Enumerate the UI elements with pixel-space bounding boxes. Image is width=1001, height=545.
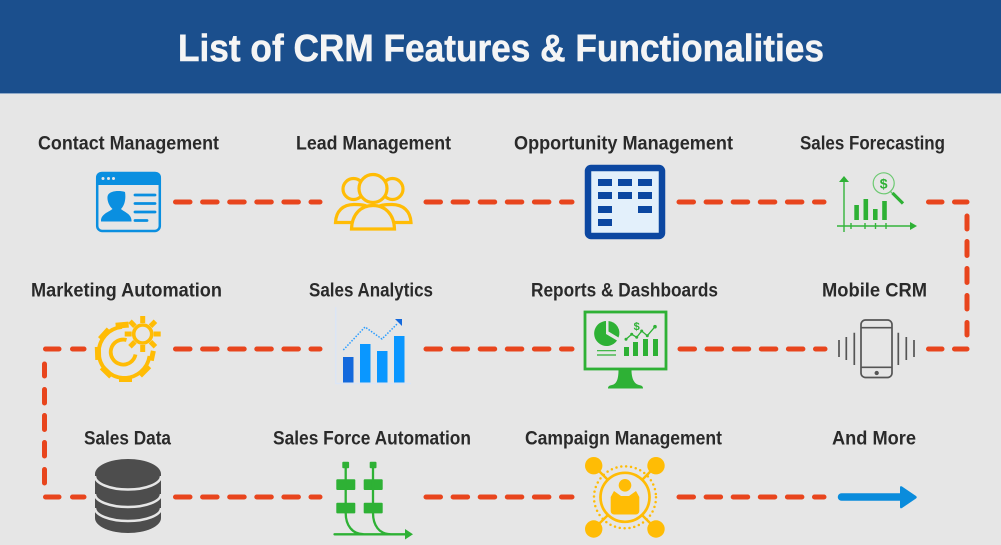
icon: analytics bars xyxy=(336,307,411,384)
label: Contact Management: Contact Management xyxy=(38,134,220,154)
label: Sales Data: Sales Data xyxy=(84,428,171,450)
icon: forecast chart with magnifier xyxy=(837,173,917,232)
label: Opportunity Management: Opportunity Management xyxy=(514,134,734,154)
icon: group of people xyxy=(336,174,411,229)
icon: forecast chart with magnifier: $ xyxy=(880,176,888,192)
label: And More: And More xyxy=(832,428,916,450)
icon: data table xyxy=(588,168,662,236)
label: Mobile CRM: Mobile CRM xyxy=(822,280,927,302)
title: List of CRM Features & Functionalities xyxy=(178,28,824,70)
label: Lead Management: Lead Management xyxy=(296,134,452,154)
icon: dashboard monitor: $ xyxy=(634,321,640,333)
icon: campaign network xyxy=(585,457,665,538)
icon: contact card xyxy=(96,172,161,231)
icon: gears xyxy=(95,316,161,382)
label: Sales Analytics: Sales Analytics xyxy=(309,280,433,302)
icon: pipeline flow xyxy=(334,462,413,540)
icon: database xyxy=(95,459,161,533)
label: Reports & Dashboards: Reports & Dashboards xyxy=(531,280,718,302)
icon: vibrating phone xyxy=(839,320,914,378)
dashed connector path xyxy=(44,202,967,497)
arrow: and more xyxy=(842,486,917,508)
label: Sales Forecasting: Sales Forecasting xyxy=(800,134,945,154)
label: Sales Force Automation: Sales Force Automation xyxy=(273,428,471,450)
icon: dashboard monitor xyxy=(585,312,666,388)
label: Campaign Management: Campaign Management xyxy=(525,428,723,450)
label: Marketing Automation: Marketing Automation xyxy=(31,280,222,302)
header banner xyxy=(0,0,1001,94)
